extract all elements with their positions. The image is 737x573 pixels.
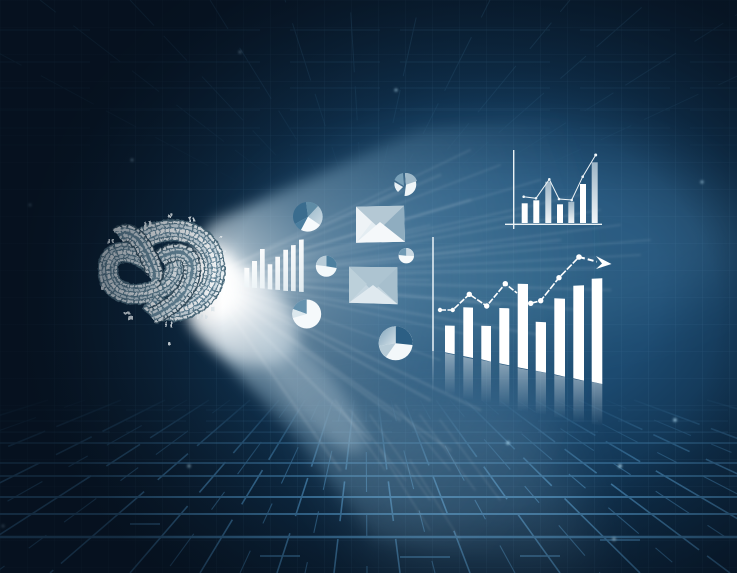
- ambient light band: [250, 150, 737, 330]
- pie chart 6: [399, 248, 414, 263]
- beam bright lobe: [163, 243, 317, 387]
- envelope 2: [349, 267, 398, 304]
- bar reflections: [445, 353, 602, 426]
- pie chart 1: [293, 202, 323, 232]
- ceiling grid: [0, 0, 737, 138]
- small bar chart: [244, 239, 304, 292]
- trend line: [522, 154, 597, 201]
- knot tube: lower left ring: [108, 252, 176, 294]
- beam floor glow: [305, 400, 600, 573]
- trend line: [438, 254, 612, 312]
- pie chart 4: [379, 326, 413, 360]
- pie chart 2: [316, 256, 337, 277]
- floor grid: [0, 400, 737, 573]
- small combo chart: [505, 150, 602, 229]
- knot particles: [101, 213, 226, 345]
- pie chart 5: [394, 173, 417, 196]
- bars: [445, 278, 602, 384]
- envelope 1: [356, 206, 405, 243]
- beam core: [188, 247, 236, 319]
- knot of data: [101, 213, 226, 345]
- chart axes: [505, 150, 602, 229]
- light beam: [163, 110, 737, 573]
- knot tube: inner band: [152, 252, 192, 316]
- pie chart 3: [292, 299, 321, 328]
- large chart: [432, 237, 612, 426]
- axis reflection: [432, 351, 434, 391]
- light rays: [205, 150, 650, 540]
- knot tube: outer right ring: [142, 230, 215, 311]
- beam lower streak: [240, 313, 380, 467]
- knot tube: upper left band: [118, 233, 154, 280]
- arrow head: [596, 256, 612, 269]
- axis: [432, 237, 434, 351]
- chart bars: [522, 162, 598, 223]
